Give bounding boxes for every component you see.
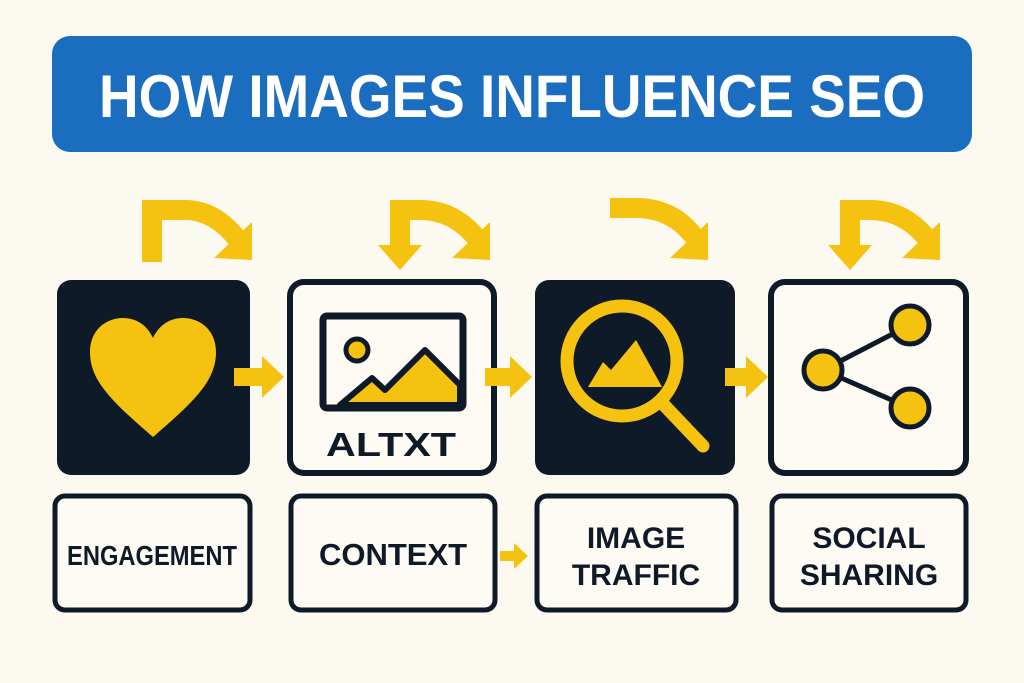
panel: engagement icon	[57, 280, 250, 475]
panel: context icon	[290, 282, 494, 473]
panel: social sharing icon	[771, 282, 966, 473]
label: social sharing	[772, 496, 966, 610]
arrow: 3 to 4	[725, 356, 768, 398]
icon: share	[804, 306, 929, 427]
label: engagement	[55, 496, 250, 610]
arrow: top 4	[828, 210, 940, 270]
arrow: top 3	[610, 208, 708, 260]
label: image traffic: IMAGE	[587, 522, 685, 555]
title	[52, 36, 972, 152]
icon: image with alt text	[323, 316, 463, 463]
arrow: top 1	[152, 210, 252, 262]
label: context	[291, 496, 495, 610]
icon: image with alt text: ALTXT	[326, 426, 456, 463]
icon: heart	[90, 318, 216, 437]
arrow: 2 to 3	[485, 356, 532, 398]
arrow: 1 to 2	[234, 356, 284, 398]
icon: magnifier	[567, 306, 703, 446]
label: context: CONTEXT	[319, 537, 467, 572]
title: HOW IMAGES INFLUENCE SEO	[99, 63, 925, 130]
arrow: top 2	[378, 210, 490, 270]
label: social sharing: SOCIAL	[812, 522, 926, 555]
arrow: small context to traffic	[500, 543, 528, 569]
label: image traffic: TRAFFIC	[572, 559, 700, 592]
panel: image traffic icon	[535, 280, 735, 475]
label: social sharing: SHARING	[800, 559, 938, 592]
label: engagement: ENGAGEMENT	[67, 540, 237, 571]
label: image traffic	[537, 496, 736, 610]
